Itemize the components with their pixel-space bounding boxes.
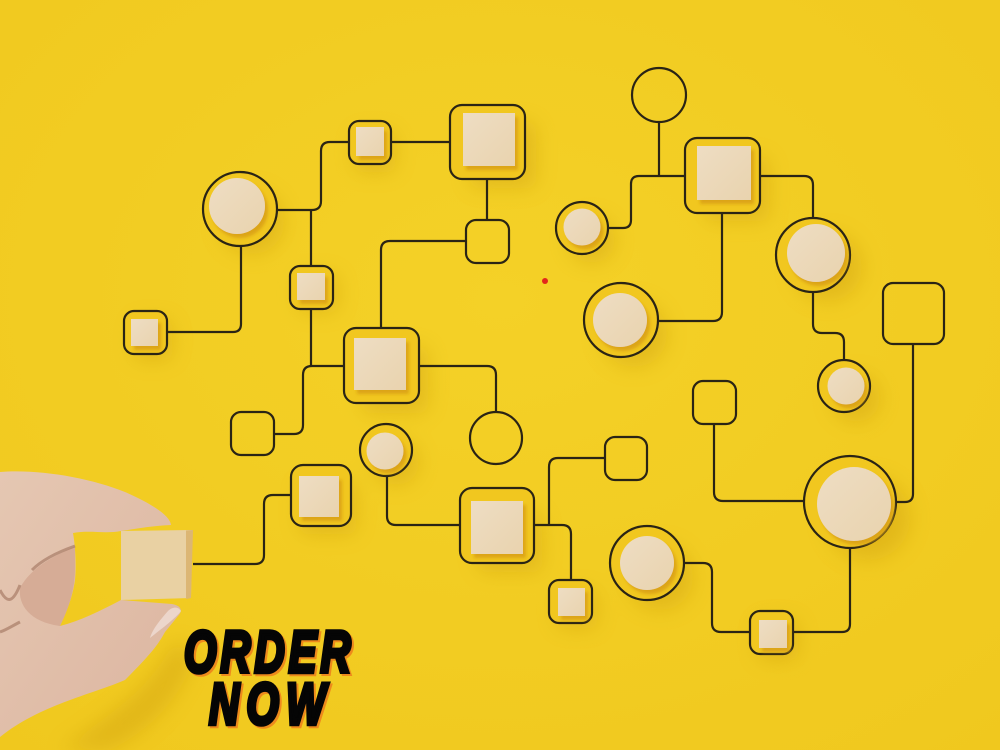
node: small circle right: [818, 360, 870, 412]
node: empty circle top: [632, 68, 686, 122]
node: large circle right: [804, 456, 896, 548]
node: empty rounded square lower left: [231, 412, 274, 455]
connector lines: [167, 122, 913, 632]
node: medium circle middle: [584, 283, 658, 357]
node: large circle left top: [203, 172, 277, 246]
call to action: order now: [184, 619, 357, 739]
node: square near hand: [291, 465, 351, 526]
node: empty rounded square far right: [883, 283, 944, 344]
node: small circle centre: [360, 424, 412, 476]
call to action: order now: ORDER: [186, 621, 357, 687]
node: medium circle bottom: [610, 526, 684, 600]
node: large square bottom centre: [460, 488, 534, 563]
call to action: order now: NOW: [209, 671, 333, 737]
node: large square centre: [344, 328, 419, 403]
node: large square top: [450, 105, 525, 179]
middle finger: [20, 546, 75, 626]
finger creases: [0, 546, 75, 632]
node: small circle top: [556, 202, 608, 254]
node: small square bottom centre: [549, 580, 592, 623]
node: empty rounded square: [466, 220, 509, 263]
node: empty rounded square bottom: [605, 437, 647, 480]
hand holding block: [0, 471, 193, 737]
node: empty rounded square right: [693, 381, 736, 424]
node: empty circle centre: [470, 412, 522, 464]
call to action: order now: NOW: [211, 673, 335, 739]
node: large square top right: [685, 138, 760, 213]
node: medium circle right: [776, 218, 850, 292]
node: small square bottom right: [750, 611, 793, 654]
node: small square top: [349, 121, 391, 164]
wooden block: [121, 530, 193, 600]
cast shadows: [60, 122, 910, 750]
node: small square far left: [124, 311, 167, 354]
red dot: [542, 278, 548, 284]
node: small square left middle: [290, 266, 333, 309]
thumbnail: [150, 608, 181, 638]
call to action: order now: ORDER: [184, 619, 355, 685]
